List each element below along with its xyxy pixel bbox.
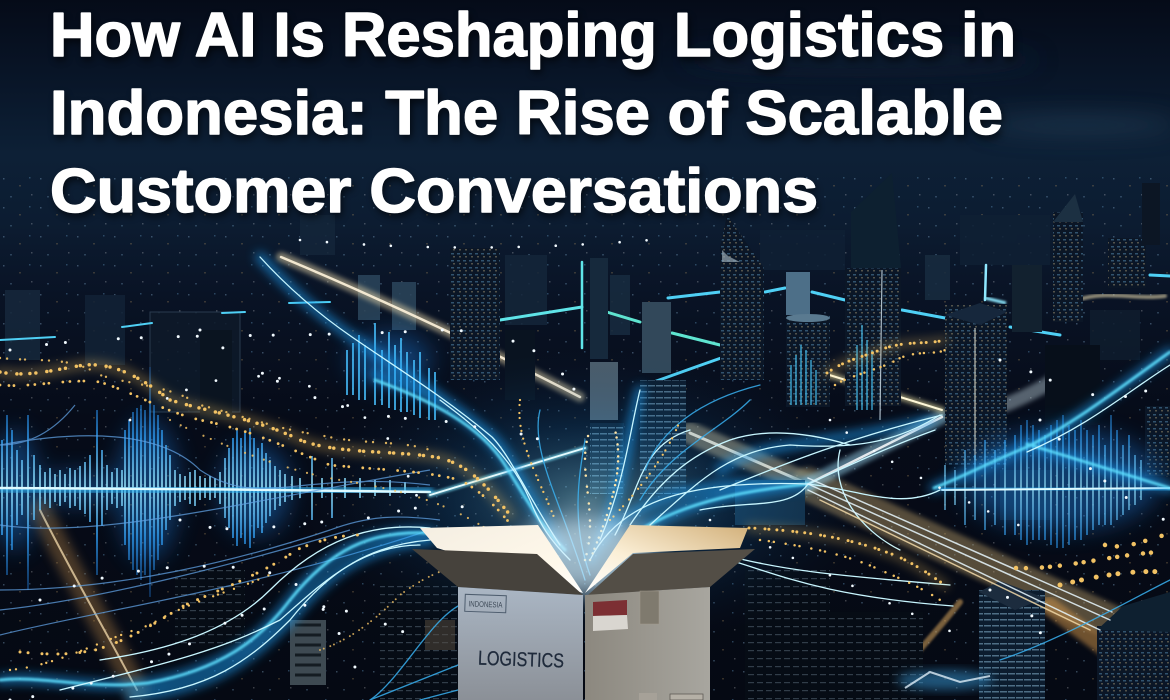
foreground buildings xyxy=(175,570,1170,700)
dark flap left xyxy=(412,549,583,595)
central light burst xyxy=(300,350,880,650)
highways xyxy=(40,257,1165,690)
title shadow: Indonesia: The Rise of Scalable xyxy=(52,83,1005,152)
logistics label: LOGISTICS xyxy=(478,648,564,673)
mid tower bars xyxy=(791,325,872,410)
far skyline xyxy=(5,215,1140,412)
right sound waveform xyxy=(945,415,1141,548)
title shadow: How AI Is Reshaping Logistics in xyxy=(52,5,1018,74)
icon: Indonesian flag xyxy=(593,600,628,631)
title shadow: Customer Conversations xyxy=(52,161,820,230)
neon link lines xyxy=(0,262,1170,385)
golden particle streams xyxy=(0,340,1165,670)
distant cloud band xyxy=(680,50,1170,134)
icon: glow behind flaps xyxy=(515,515,655,595)
white sparkle particles xyxy=(10,240,1165,700)
energy streams xyxy=(0,257,1170,700)
bloom behind waveform xyxy=(0,334,1160,560)
horizontal light beams xyxy=(0,448,1170,495)
title xyxy=(50,1,1016,226)
dark flap right xyxy=(588,549,755,595)
bright inner flap right xyxy=(585,525,748,593)
title line 2: Indonesia: The Rise of Scalable xyxy=(50,79,1003,148)
title line 1: How AI Is Reshaping Logistics in xyxy=(50,1,1016,70)
box face right xyxy=(585,587,710,700)
left sound waveform xyxy=(2,367,405,597)
city light speckle xyxy=(0,175,1170,700)
box face left xyxy=(458,587,583,700)
packing tape xyxy=(640,591,659,624)
shipping stickers xyxy=(639,693,703,700)
bright inner flap left xyxy=(420,525,583,593)
title line 3: Customer Conversations xyxy=(50,157,818,226)
cardboard box xyxy=(412,515,755,700)
title shadow xyxy=(52,5,1018,230)
brand label xyxy=(465,594,506,613)
main towers xyxy=(200,173,1170,525)
brand label: INDONESIA xyxy=(468,599,503,610)
thin horizontal threads xyxy=(0,405,440,635)
upper bar spike xyxy=(347,323,435,420)
